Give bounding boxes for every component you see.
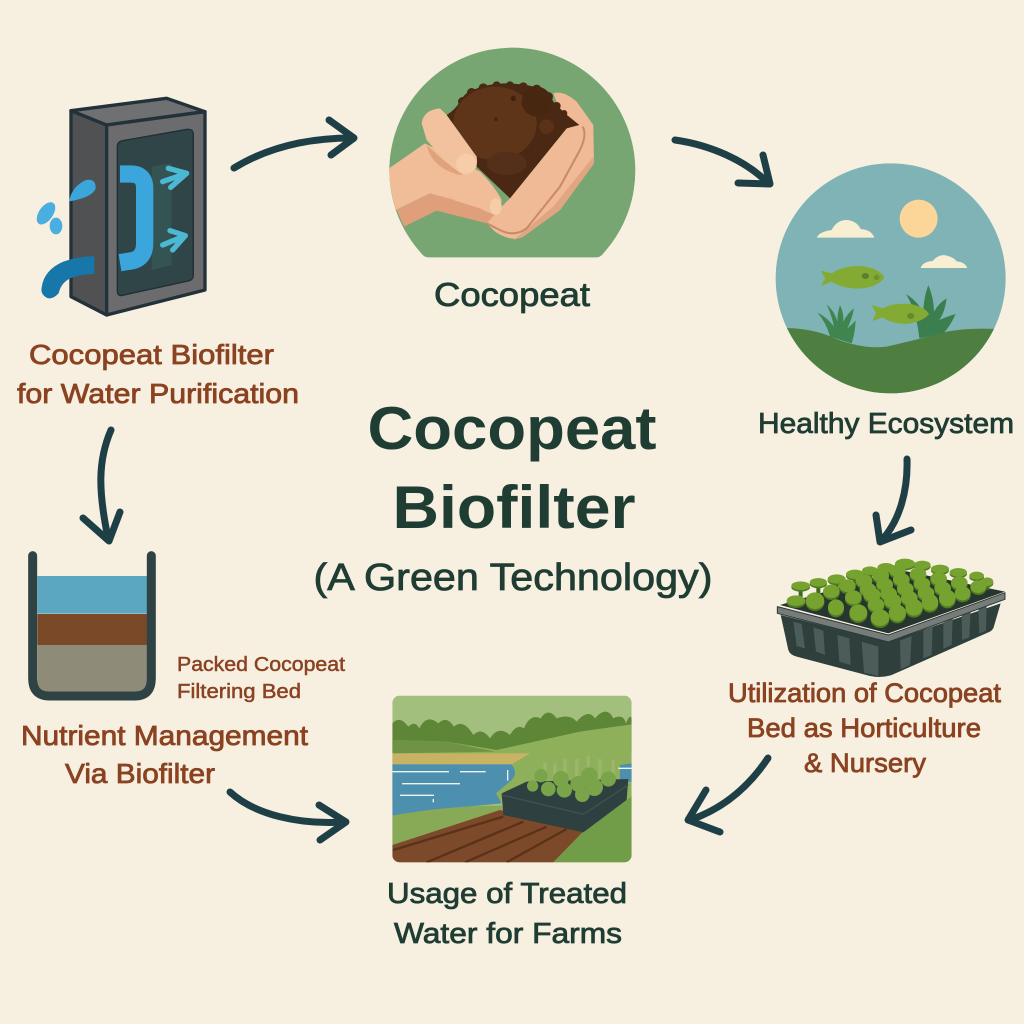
label: Nutrient Management Via Biofilter: Via Biofilter	[65, 758, 215, 789]
title: Biofilter	[392, 474, 636, 541]
label: Packed Cocopeat Filtering Bed: Filtering Bed	[177, 681, 301, 703]
label: Cocopeat Biofilter for Water Purification: Cocopeat Biofilter	[29, 339, 274, 370]
seedlings, lit tops	[787, 559, 993, 626]
box top face	[71, 98, 205, 125]
palm crease	[487, 127, 584, 233]
arrow: ecosystem to nursery	[876, 459, 911, 542]
fish 1	[821, 266, 884, 289]
title: Cocopeat	[368, 395, 657, 462]
label: Cocopeat Biofilter for Water Purification	[17, 339, 299, 409]
label: Nutrient Management Via Biofilter: Nutrient Management	[21, 720, 308, 751]
water layer	[37, 576, 147, 614]
tray rim	[777, 593, 1005, 642]
raised bed	[502, 779, 628, 832]
ground	[787, 328, 994, 394]
label: Cocopeat Biofilter for Water Purification: for Water Purification	[17, 378, 299, 409]
lake	[392, 764, 515, 816]
tree line	[392, 712, 632, 752]
mid hills	[392, 724, 632, 802]
icon: biofilter box	[33, 98, 205, 315]
box left face	[71, 111, 107, 315]
label: Usage of Treated Water for Farms: Usage of Treated	[387, 878, 627, 910]
label: Nutrient Management Via Biofilter	[21, 720, 308, 789]
icon: farm scene	[392, 696, 632, 862]
arm and palm	[389, 143, 502, 210]
thumb	[422, 108, 477, 175]
icon: hands holding cocopeat	[389, 48, 635, 257]
label: Packed Cocopeat Filtering Bed: Packed Cocopeat	[177, 654, 345, 676]
fish 2	[872, 304, 929, 324]
cocopeat layer	[37, 614, 147, 645]
label: Utilization of Cocopeat Bed as Horticulture & Nursery: & Nursery	[804, 748, 927, 778]
sand layer	[37, 645, 147, 692]
seedlings, shaded base	[787, 560, 993, 628]
label: Cocopeat: Cocopeat	[434, 276, 590, 313]
clouds	[817, 220, 874, 238]
title	[314, 395, 712, 599]
green dome	[389, 48, 635, 257]
water glints	[392, 768, 632, 802]
tray ribs	[793, 603, 987, 676]
arm shadow	[397, 193, 502, 227]
sand bank	[392, 753, 530, 764]
label: Utilization of Cocopeat Bed as Horticulture & Nursery: Utilization of Cocopeat	[728, 678, 1001, 708]
icon: packed filter bed container	[33, 556, 151, 696]
soil rows	[392, 810, 583, 862]
bed seedlings	[527, 756, 616, 802]
icon: nursery tray	[777, 559, 1005, 677]
label: Utilization of Cocopeat Bed as Horticulture & Nursery: Bed as Horticulture	[747, 713, 981, 743]
seedling stems	[801, 566, 987, 597]
title: (A Green Technology)	[314, 557, 712, 599]
arrow: biofilter to cocopeat	[234, 120, 354, 168]
icon: healthy ecosystem	[776, 163, 1006, 394]
arrow: nursery to farms	[688, 758, 768, 832]
lower finger	[453, 172, 502, 214]
arrow: biofilter to nutrient management	[83, 430, 120, 541]
label: Utilization of Cocopeat Bed as Horticulture & Nursery	[728, 678, 1001, 778]
sky	[392, 696, 632, 862]
container walls	[33, 556, 151, 696]
label: Packed Cocopeat Filtering Bed	[177, 654, 345, 703]
water drops	[69, 180, 96, 201]
plants	[817, 304, 856, 343]
bank	[392, 806, 503, 845]
soil	[447, 81, 579, 198]
label: Healthy Ecosystem: Healthy Ecosystem	[758, 408, 1014, 440]
outflow arrows	[163, 168, 187, 250]
internal pipe	[120, 174, 145, 263]
sky	[773, 160, 1010, 397]
sun	[900, 200, 938, 238]
label: Usage of Treated Water for Farms: Water for Farms	[394, 918, 622, 950]
foreground grass	[553, 797, 632, 862]
tray top	[780, 570, 1005, 633]
inflow pipe	[41, 256, 94, 298]
window	[117, 129, 193, 296]
arrow: cocopeat to ecosystem	[675, 140, 770, 184]
box front face	[107, 112, 205, 315]
arrow: nutrient management to farms	[230, 792, 346, 840]
right hand	[487, 93, 594, 239]
tray body	[781, 603, 1001, 677]
label: Usage of Treated Water for Farms	[387, 878, 627, 950]
